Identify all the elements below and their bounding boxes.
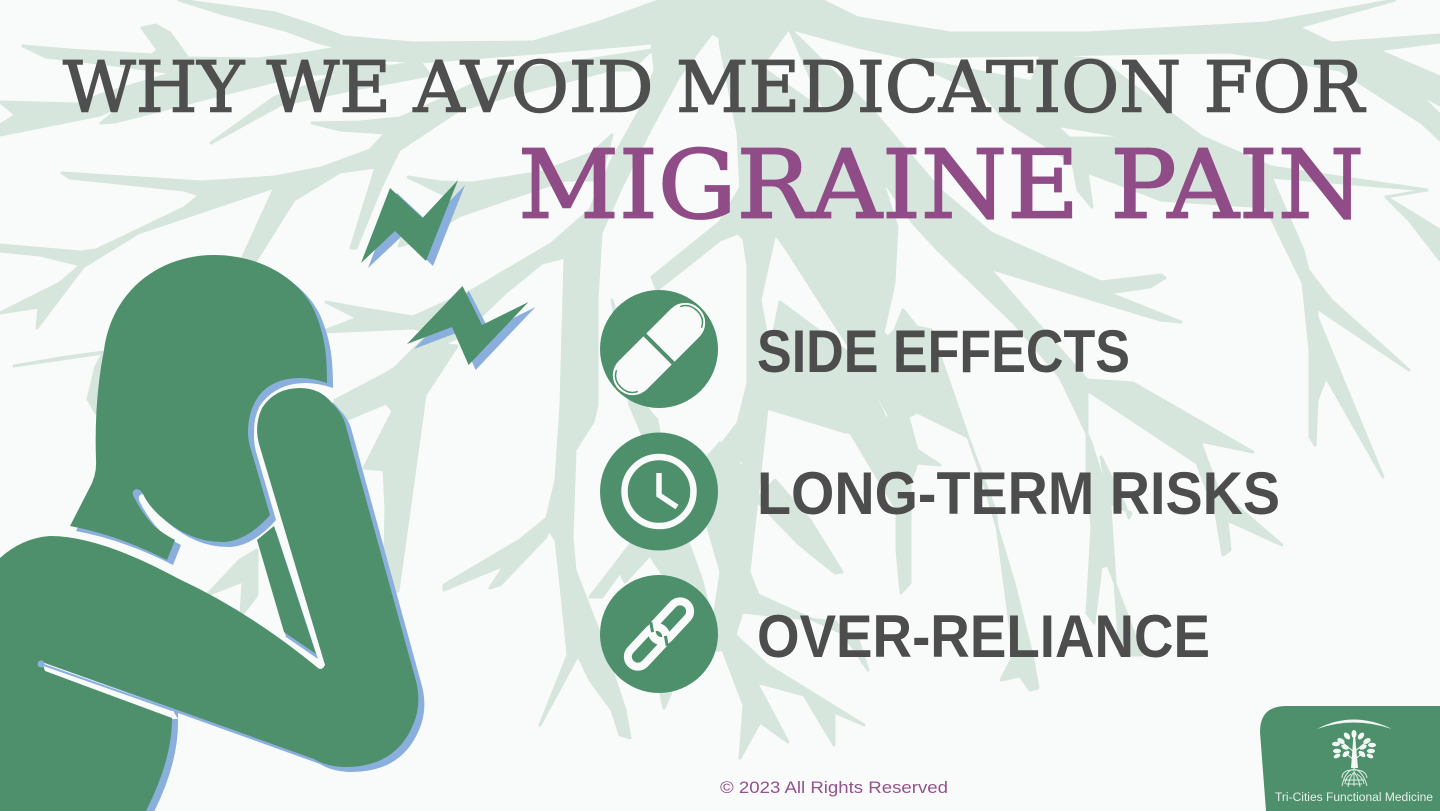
- figure: slit between arm and torso: [38, 662, 178, 719]
- item: long-term risks: [600, 432, 1280, 550]
- figure: head: [70, 255, 327, 560]
- footer copyright: © 2023 All Rights Reserved: [720, 779, 948, 797]
- figure: neck side: [257, 526, 316, 654]
- main left trunk: [321, 33, 712, 738]
- icon: chain link: [600, 575, 718, 693]
- label: long-term risks: LONG-TERM RISKS: [757, 460, 1280, 527]
- logo wordmark: Tri-Cities Functional Medicine: [1275, 792, 1433, 804]
- item: side effects: [600, 290, 1130, 408]
- trunk through the icons: [590, 405, 720, 650]
- branch from centre trunk to pill: [652, 180, 745, 290]
- label: over-reliance: OVER-RELIANCE: [757, 603, 1210, 670]
- figure: body and arm: [0, 388, 418, 811]
- logo tree: [1332, 730, 1376, 768]
- icon: lightning bolt upper: [361, 180, 465, 268]
- icon: lightning bolt lower: [407, 286, 536, 370]
- upper right limbs: [904, 55, 1440, 477]
- logo arc: [1317, 720, 1392, 729]
- item: over-reliance: [600, 575, 1210, 693]
- title: migraine pain: MIGRAINE PAIN: [518, 130, 1364, 240]
- icon: pill: [600, 290, 718, 408]
- centre trunk: [703, 28, 889, 758]
- figure shadow: [6, 260, 424, 811]
- label: side effects: SIDE EFFECTS: [757, 318, 1130, 385]
- icon: clock: [600, 432, 718, 550]
- figure: person holding head: [0, 255, 424, 811]
- logo badge: [1260, 706, 1440, 811]
- title: why we avoid medication for: WHY WE AVOID MEDICATION FOR: [63, 46, 1366, 128]
- right of centre trunk: [761, 67, 1038, 690]
- logo roots: [1342, 768, 1367, 787]
